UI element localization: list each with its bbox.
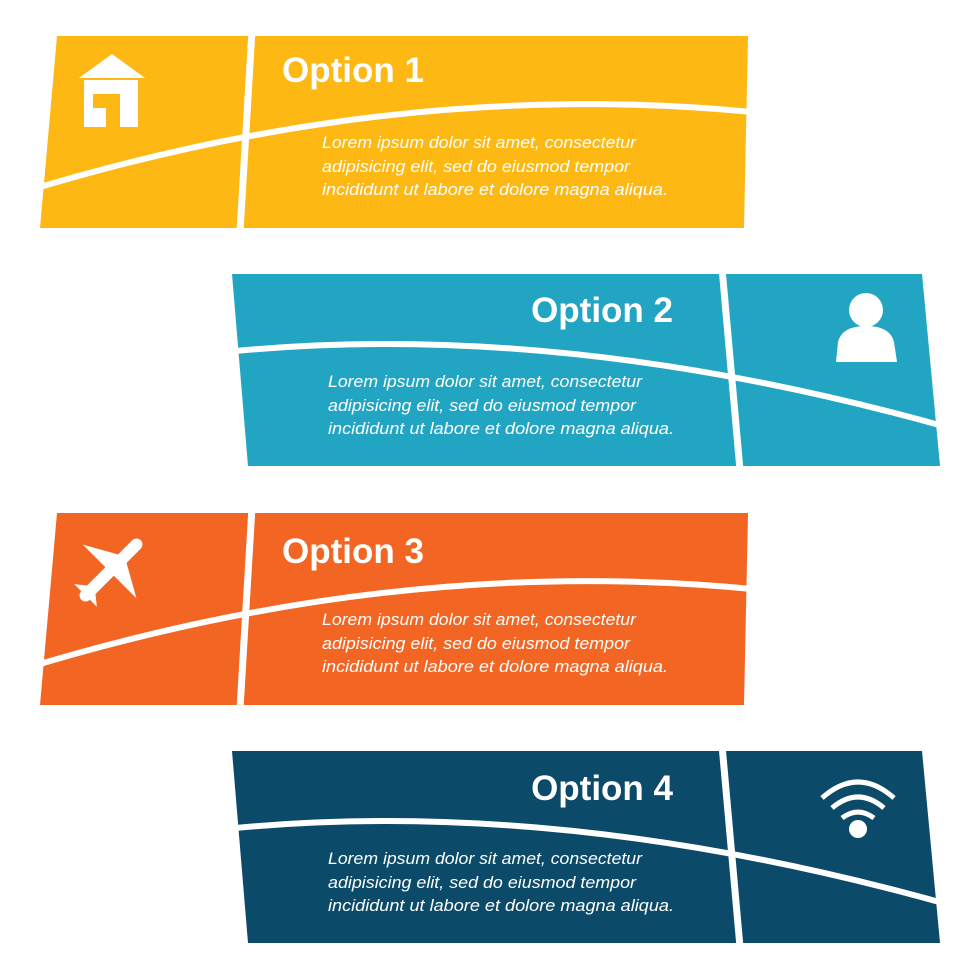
text block: adipisicing elit, sed do eiusmod tempor: [322, 158, 632, 176]
text block: [328, 850, 674, 915]
text block: Lorem ipsum dolor sit amet, consectetur: [322, 611, 638, 629]
text block: Lorem ipsum dolor sit amet, consectetur: [328, 373, 644, 391]
text block: [328, 373, 674, 438]
band background: [232, 751, 940, 943]
band background: [232, 274, 940, 466]
text block: incididunt ut labore et dolore magna aliqua.: [328, 897, 674, 915]
heading: Option 1: [282, 51, 424, 90]
band background: [40, 36, 748, 228]
text block: incididunt ut labore et dolore magna aliqua.: [322, 658, 668, 676]
band background: [40, 513, 748, 705]
text block: adipisicing elit, sed do eiusmod tempor: [328, 874, 638, 892]
panel: option 4: [225, 745, 950, 947]
heading: Option 4: [531, 769, 674, 808]
heading: Option 2: [531, 291, 673, 330]
text block: Lorem ipsum dolor sit amet, consectetur: [328, 850, 644, 868]
icon: person: [836, 293, 897, 362]
text block: adipisicing elit, sed do eiusmod tempor: [322, 635, 632, 653]
icon: wifi: [822, 782, 894, 838]
panel: option 1: [30, 30, 752, 232]
icon: plane: [54, 513, 168, 627]
text block: Lorem ipsum dolor sit amet, consectetur: [322, 134, 638, 152]
text block: adipisicing elit, sed do eiusmod tempor: [328, 397, 638, 415]
text block: incididunt ut labore et dolore magna aliqua.: [328, 420, 674, 438]
panel: option 2: [225, 268, 950, 470]
panel: option 3: [30, 507, 752, 709]
text block: incididunt ut labore et dolore magna aliqua.: [322, 181, 668, 199]
heading: Option 3: [282, 532, 424, 571]
text block: [322, 134, 668, 199]
text block: [322, 611, 668, 676]
icon: house: [79, 54, 145, 127]
